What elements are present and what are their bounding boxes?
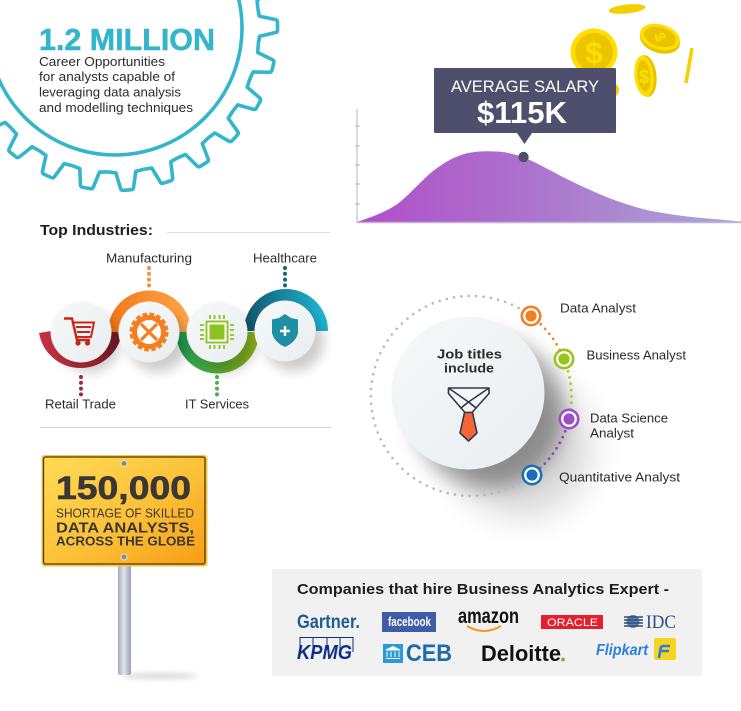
icon: falling coins bbox=[570, 3, 692, 98]
main disc bbox=[392, 316, 544, 470]
headline: 1.2 million: 1.2 MILLION bbox=[39, 22, 215, 57]
icon: health shield bbox=[254, 300, 316, 362]
logo: deloitte: Deloitte bbox=[481, 641, 561, 666]
text block: career opportunities: leveraging data analysis bbox=[39, 86, 181, 100]
heading: top industries: Top Industries: bbox=[40, 222, 153, 239]
labels: job titles: Data Science bbox=[590, 412, 668, 426]
sign text: 150,000 bbox=[56, 470, 191, 506]
labels: job titles: Business Analyst bbox=[586, 348, 687, 362]
logo: flipkart bbox=[596, 638, 676, 660]
logo: ceb: CEB bbox=[406, 640, 452, 667]
labels: industries: Healthcare bbox=[253, 252, 317, 266]
labels: industries: Manufacturing bbox=[106, 252, 192, 266]
text block: career opportunities: Career Opportunities bbox=[39, 55, 165, 69]
heading: job titles include: include bbox=[444, 360, 494, 376]
labels: job titles: Data Analyst bbox=[560, 302, 637, 316]
logo: ceb bbox=[383, 640, 452, 667]
logo: oracle: ORACLE bbox=[547, 617, 598, 629]
icon: gear and tools bbox=[118, 302, 180, 362]
labels: job titles: Quantitative Analyst bbox=[559, 470, 681, 484]
logo: facebook: facebook bbox=[388, 615, 431, 629]
sign text: ACROSS THE GLOBE bbox=[56, 534, 195, 548]
icon: falling coins: $ bbox=[639, 67, 650, 88]
labels: industries: IT Services bbox=[185, 398, 249, 412]
logo: idc: IDC bbox=[646, 612, 676, 633]
icon: microchip bbox=[186, 302, 248, 362]
road sign: 150,000 shortage bbox=[42, 455, 208, 679]
panel: job titles bbox=[371, 296, 590, 516]
panel: industries chain bbox=[45, 295, 324, 372]
sign board bbox=[42, 455, 208, 566]
icon: falling coins: $ bbox=[650, 30, 669, 45]
labels: job titles bbox=[559, 302, 687, 484]
logo: amazon: amazon bbox=[458, 605, 519, 628]
chart: salary distribution bbox=[355, 109, 741, 223]
labels: job titles: Analyst bbox=[590, 426, 635, 440]
logo: kpmg: KPMG bbox=[297, 642, 352, 664]
heading: job titles include bbox=[437, 346, 502, 376]
labels: industries: Retail Trade bbox=[45, 398, 116, 412]
sign text: SHORTAGE OF SKILLED bbox=[56, 506, 194, 520]
icon: tie bbox=[448, 388, 489, 441]
marker: data science analyst bbox=[560, 410, 578, 428]
heading: companies: Companies that hire Business Analytics Expert - bbox=[297, 581, 669, 598]
logo: flipkart: Flipkart bbox=[596, 642, 649, 659]
sign post bbox=[118, 565, 131, 675]
gear graphic bbox=[0, 0, 278, 191]
text block: career opportunities: for analysts capable of bbox=[39, 70, 176, 84]
logo: oracle bbox=[541, 615, 603, 629]
marker: data analyst bbox=[522, 307, 540, 325]
connector dots: industries bbox=[81, 268, 285, 395]
logo: idc bbox=[624, 612, 676, 633]
marker: quantitative analyst bbox=[523, 466, 541, 484]
panel: companies bbox=[272, 569, 702, 676]
callout: average salary: AVERAGE SALARY bbox=[451, 77, 599, 96]
icon: shopping cart bbox=[50, 302, 112, 362]
heading: job titles include: Job titles bbox=[437, 346, 502, 362]
marker: business analyst bbox=[555, 350, 573, 368]
logo: gartner: Gartner. bbox=[297, 612, 360, 633]
sign text: DATA ANALYSTS, bbox=[56, 520, 194, 536]
logo: facebook bbox=[382, 612, 436, 632]
labels: industries bbox=[45, 252, 317, 412]
callout: average salary: $115K bbox=[477, 95, 568, 130]
text block: career opportunities bbox=[39, 55, 193, 115]
sign text bbox=[56, 470, 195, 548]
text block: career opportunities: and modelling techniques bbox=[39, 101, 193, 115]
callout: average salary bbox=[434, 68, 616, 144]
icon: falling coins: $ bbox=[585, 35, 603, 70]
